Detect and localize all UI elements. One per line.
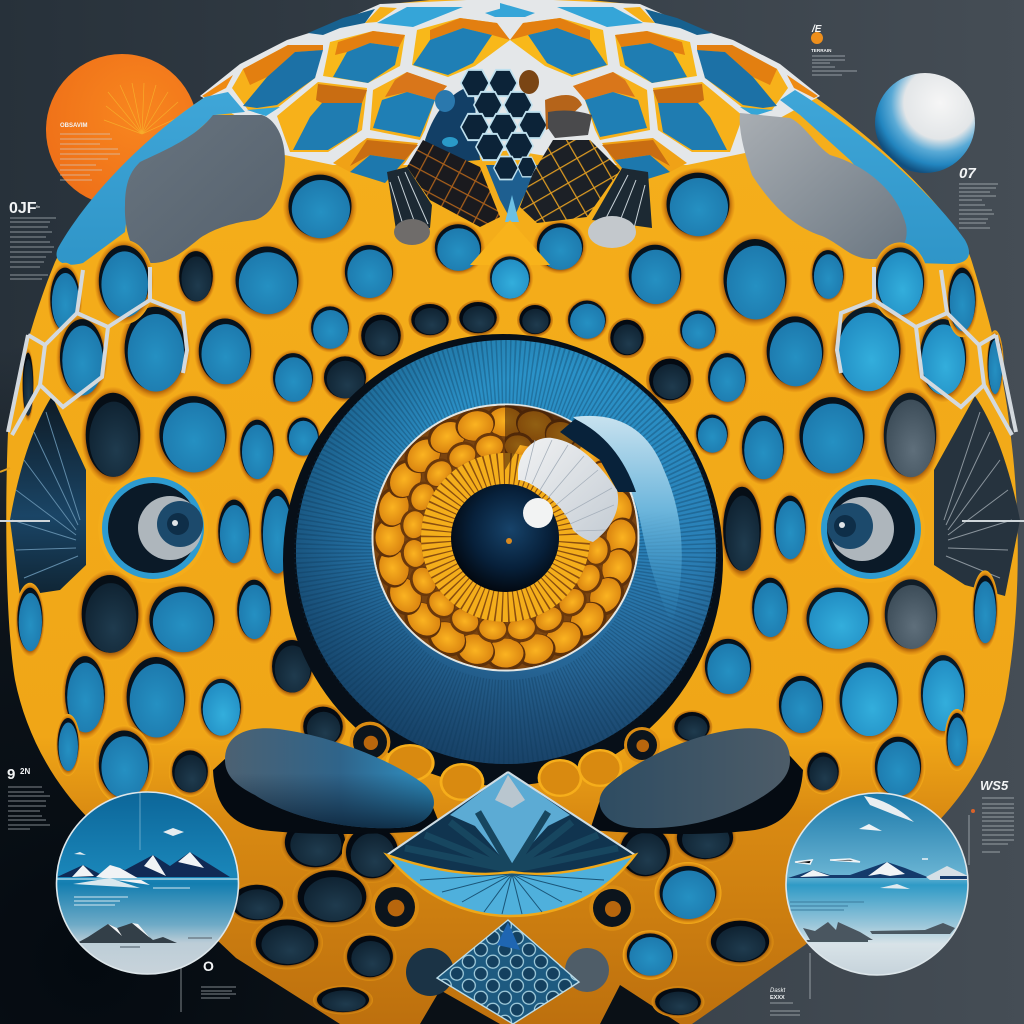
caption: bottom right: Daskt: [770, 988, 786, 994]
iris: [371, 403, 640, 672]
upper diamond: [387, 772, 635, 916]
left blue cap: [57, 92, 245, 265]
caption: bottom centre left: O: [203, 958, 214, 974]
bottom left caption lines: [181, 968, 236, 1012]
right side fin: [934, 396, 1024, 596]
honeycomb cells upper centre: [283, 168, 735, 358]
caption: upper left: fin: [36, 204, 40, 209]
honeycomb cluster: [460, 69, 592, 180]
blue ribbed disc: [296, 340, 716, 764]
honeycomb cells bottom: [227, 813, 774, 1024]
centre yellow triangle: [470, 220, 550, 303]
caption: upper right: [959, 165, 998, 228]
right grey ribbed fan: [588, 168, 652, 248]
upper left caption lines: [10, 218, 56, 279]
white shell: [518, 438, 618, 542]
left speaker lens: [98, 473, 208, 583]
right blue cap: [780, 90, 969, 264]
caption: lower left: [7, 766, 50, 829]
caption: bottom centre left: [181, 958, 236, 1012]
left grey ribbed fan: [387, 167, 432, 245]
right landscape medallion: [786, 793, 970, 977]
caption: bottom right: EXXX: [770, 995, 785, 1001]
top centre blue spout and cluster: [425, 69, 592, 222]
orange marker: [971, 809, 975, 813]
caption: orange disc lines: [60, 134, 120, 180]
pupil: [451, 484, 559, 592]
pupil highlight: [506, 498, 553, 544]
pale crescent: [573, 416, 682, 625]
honeycomb cells right: [646, 233, 1004, 802]
top right caption lines: [812, 56, 857, 75]
left grey cloud blob: [125, 115, 285, 263]
caption: upper right: 07: [959, 165, 976, 182]
left net wing: [407, 140, 500, 227]
dome hexagon cells: [200, 0, 820, 183]
orange badge: [811, 32, 823, 44]
caption: upper left: [9, 200, 56, 279]
honeycomb cells left: [15, 240, 404, 805]
right pill blob: [590, 728, 803, 834]
caption: lower left: 2N: [20, 767, 30, 776]
lower right caption lines: [969, 798, 1014, 865]
left landscape medallion: [56, 791, 240, 975]
caption: upper left: 0JF: [9, 200, 37, 217]
caption: top right: TERRAIN: [811, 48, 832, 53]
lower left caption lines: [8, 787, 50, 829]
right net wing: [520, 140, 620, 223]
white and blue sphere: [875, 73, 975, 173]
left side fin: [0, 396, 86, 596]
caption: bottom right: [770, 953, 810, 1015]
orange sun disc: [46, 54, 198, 206]
caption: top right: /E: [811, 24, 822, 35]
central eye: [283, 334, 723, 786]
right grey cloud blob: [740, 113, 907, 259]
bottom right caption lines: [770, 953, 810, 1015]
caption: lower right: [969, 778, 1014, 865]
caption: lower right: WS5: [980, 778, 1009, 793]
rings under the eye: [300, 704, 712, 801]
upper right caption lines: [959, 184, 998, 228]
caption: top right: [811, 24, 857, 75]
right speaker lens: [817, 475, 925, 583]
caption: lower left: 9: [7, 766, 15, 783]
lower diamond and stones: [406, 920, 609, 1024]
white web lines: [8, 267, 1016, 435]
left pill blob: [213, 728, 442, 834]
orange disc caption: OBSAVIM: [60, 123, 88, 129]
